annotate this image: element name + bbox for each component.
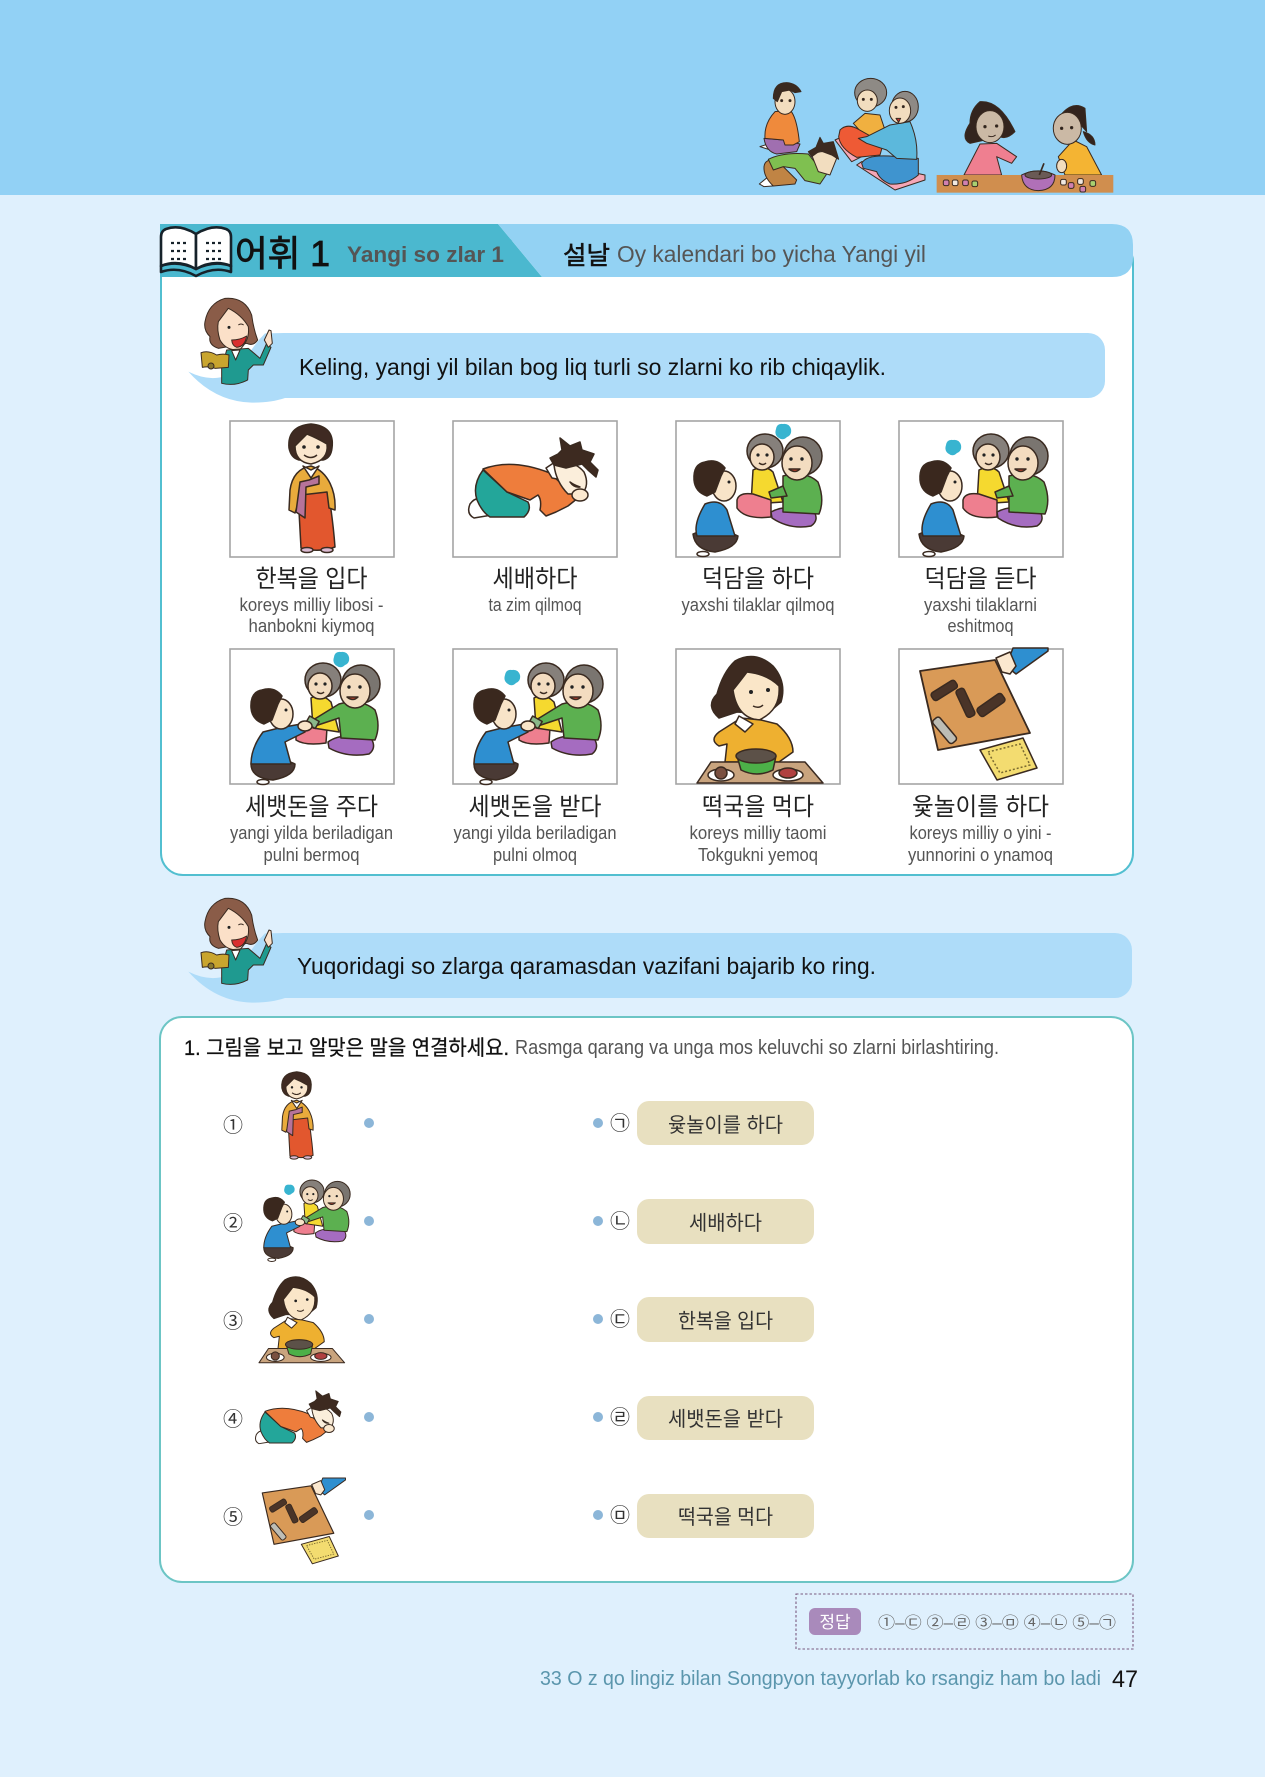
card: wear hanbok <box>230 421 394 636</box>
card: give new year money: pulni bermoq <box>264 845 360 865</box>
icon: open book <box>161 227 231 276</box>
card: bow <box>453 421 617 615</box>
speech bubble 1 with teacher <box>188 298 1105 403</box>
header illustration: family and songpyon <box>759 78 1113 193</box>
row 3: ③ <box>223 1310 243 1333</box>
row 2: ② <box>223 1212 243 1235</box>
row 1 <box>223 1072 814 1159</box>
card: receive new year money: pulni olmoq <box>493 845 577 865</box>
footer note: 33 O z qo lingiz bilan Songpyon tayyorlab ko rsangiz ham bo ladi <box>540 1668 1101 1690</box>
card: receive new year money: yangi yilda beriladigan <box>454 823 616 843</box>
row 5 <box>223 1478 814 1564</box>
row 5: ⑤ <box>223 1506 243 1529</box>
row 4 <box>223 1391 814 1444</box>
subtitle: Yangi so zlar 1 <box>347 242 504 267</box>
answer badge <box>809 1608 861 1635</box>
card: play yut: 윷놀이를 하다 <box>912 793 1049 821</box>
row 4: ㉣ <box>610 1406 630 1429</box>
card: wear hanbok: 한복을 입다 <box>256 565 368 593</box>
icon: teacher <box>201 298 272 384</box>
card: eat tteokguk: koreys milliy taomi <box>690 823 826 843</box>
card: play yut: yunnorini o ynamoq <box>908 845 1053 865</box>
row 3: 한복을 입다 <box>678 1310 773 1333</box>
title bar <box>160 224 1133 277</box>
card: give good wishes: yaxshi tilaklar qilmoq <box>682 595 834 615</box>
card: play yut <box>899 648 1063 865</box>
row 3 <box>223 1277 814 1363</box>
answer box: 정답 <box>819 1613 851 1632</box>
card: hear good wishes: eshitmoq <box>948 616 1014 636</box>
bubble text: Yuqoridagi so zlarga qaramasdan vazifani bajarib ko ring. <box>297 953 876 979</box>
card: give new year money: yangi yilda beriladigan <box>230 823 393 843</box>
card: receive new year money: 세뱃돈을 받다 <box>468 793 602 821</box>
card: hear good wishes: yaxshi tilaklarni <box>924 595 1037 615</box>
top header band <box>0 0 1265 195</box>
card: wear hanbok: koreys milliy libosi - <box>240 595 384 615</box>
panel: vocabulary <box>161 240 1133 875</box>
card: eat tteokguk: 떡국을 먹다 <box>702 793 814 821</box>
card: receive new year money <box>453 649 617 865</box>
answer box <box>796 1594 1133 1649</box>
exercise instruction translation: Rasmga qarang va unga mos keluvchi so zlarni birlashtiring. <box>515 1037 999 1059</box>
row 2: 세배하다 <box>689 1212 762 1235</box>
row 4: ④ <box>223 1408 243 1431</box>
card: give good wishes: 덕담을 하다 <box>702 565 814 593</box>
icon: teacher <box>201 898 272 984</box>
row 1: ㉠ <box>610 1112 630 1135</box>
heading: eohwi 1: 어휘 1 <box>235 233 330 274</box>
row 4: 세뱃돈을 받다 <box>668 1408 783 1431</box>
topic translation: Oy kalendari bo yicha Yangi yil <box>617 241 926 267</box>
row 3: ㉢ <box>610 1308 630 1331</box>
exercise instruction korean: 1. 그림을 보고 알맞은 말을 연결하세요. <box>184 1037 509 1060</box>
row 5: 떡국을 먹다 <box>678 1506 773 1529</box>
card: play yut: koreys milliy o yini - <box>910 823 1052 843</box>
card: bow: 세배하다 <box>492 565 578 593</box>
card: bow: ta zim qilmoq <box>488 595 582 615</box>
card: give good wishes <box>676 421 840 615</box>
row 2: ㉡ <box>610 1210 630 1233</box>
page number: 47 <box>1112 1666 1138 1693</box>
panel: matching exercise <box>160 1017 1133 1582</box>
card: give new year money <box>230 649 394 865</box>
bubble text: Keling, yangi yil bilan bog liq turli so zlarni ko rib chiqaylik. <box>299 354 886 380</box>
row 5: ㉤ <box>610 1504 630 1527</box>
card: wear hanbok: hanbokni kiymoq <box>248 616 374 636</box>
card: hear good wishes: 덕담을 듣다 <box>924 565 1036 593</box>
row 1: 윷놀이를 하다 <box>668 1114 783 1137</box>
card: eat tteokguk <box>676 649 840 865</box>
row 1: ① <box>223 1114 243 1137</box>
card: hear good wishes <box>899 421 1063 636</box>
card: give new year money: 세뱃돈을 주다 <box>245 793 378 821</box>
answer key: ①–㉢ ②–㉣ ③–㉤ ④–㉡ ⑤–㉠ <box>878 1614 1116 1632</box>
speech bubble 2 with teacher <box>188 898 1132 1003</box>
topic korean: 설날 <box>563 242 610 270</box>
card: eat tteokguk: Tokgukni yemoq <box>698 845 818 865</box>
row 2 <box>223 1180 814 1261</box>
